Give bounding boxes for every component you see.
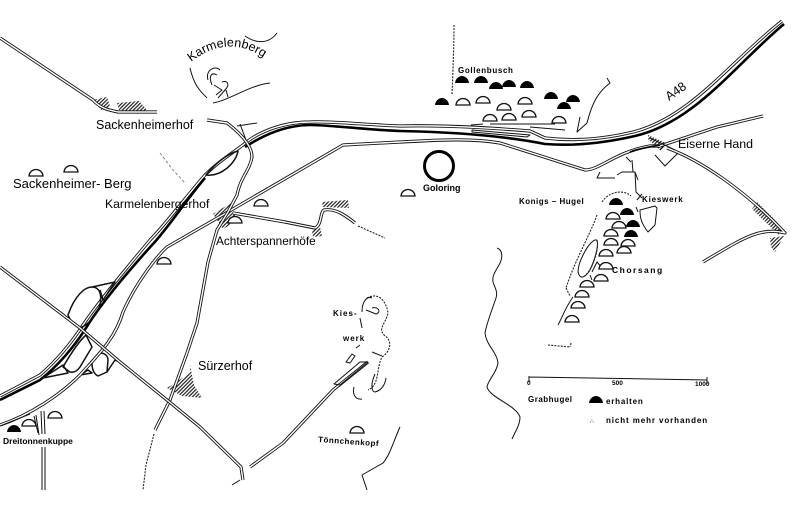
road: east of Eiserne Hand [650, 138, 785, 262]
labels: Achterspannerhöfe [216, 234, 316, 248]
scale bar and legend: erhalten [606, 397, 644, 406]
burial mounds: scattered [7, 166, 415, 433]
labels [3, 38, 753, 448]
gravel pit [232, 296, 390, 485]
road: diagonal to Kieswerk [0, 267, 368, 480]
scale bar and legend: 500 [612, 380, 623, 387]
labels: Chorsang [612, 265, 664, 275]
road: south parallel [0, 116, 763, 425]
road: north-west and north-south [0, 38, 257, 490]
road: Achterspannerhöfe branch [233, 210, 385, 238]
Karmelenberg contours [190, 33, 277, 103]
Goloring circle [424, 152, 454, 180]
labels: Karmelenbergerhof [105, 197, 210, 211]
scale bar and legend: nicht mehr vorhanden [606, 416, 708, 425]
labels: Dreitonnenkuppe [3, 436, 73, 446]
interchange: Karmelenberg [206, 151, 238, 175]
hatched settlements [93, 97, 785, 398]
scale bar and legend: 0 [527, 380, 531, 387]
Kieswerk tracks at Konigs-Hugel [548, 145, 660, 347]
road: Dreitonnenkuppe [0, 411, 45, 490]
burial mounds: Gollenbusch [435, 76, 580, 123]
labels: Kies- [333, 309, 358, 318]
labels: Goloring [423, 183, 460, 193]
labels: Sackenheimer- Berg [13, 176, 132, 191]
labels: Gollenbusch [458, 66, 514, 75]
labels: Sackenheimerhof [96, 118, 194, 132]
scale bar and legend: Grabhugel [528, 395, 573, 404]
labels: Karmelenberg [186, 38, 266, 62]
motorway A48 [0, 21, 784, 400]
river line [362, 248, 520, 490]
labels: Konigs – Hugel [519, 197, 584, 206]
scale bar and legend: 1000 [695, 381, 710, 388]
labels: werk [342, 334, 365, 343]
scale bar and legend: ∴ [590, 419, 594, 425]
burial mounds: Konigs-Hugel and Chorsang [565, 198, 640, 322]
interchanges: south-west [43, 282, 120, 378]
labels: Tönnchenkopf [318, 435, 379, 448]
labels: A48 [663, 79, 689, 103]
labels: Sürzerhof [198, 359, 253, 373]
Gollenbusch tracks [452, 25, 610, 137]
labels: Kieswerk [642, 195, 684, 204]
labels: Eiserne Hand [678, 137, 753, 151]
scale bar and legend [527, 376, 710, 425]
